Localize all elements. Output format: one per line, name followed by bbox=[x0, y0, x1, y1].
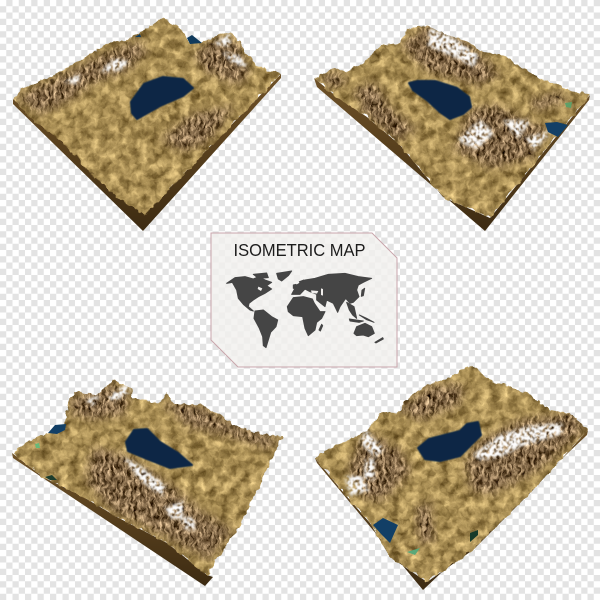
terrain surface bbox=[10, 15, 285, 220]
green field bbox=[565, 102, 572, 108]
terrain surface bbox=[310, 22, 595, 222]
small lake bbox=[48, 424, 66, 434]
lake bbox=[131, 77, 193, 119]
isometric terrain block: bottom right bbox=[312, 362, 592, 590]
soil side faces bbox=[314, 78, 590, 231]
small lake bbox=[545, 122, 568, 137]
soil side faces bbox=[315, 430, 588, 590]
center label card bbox=[211, 233, 397, 367]
soil side faces bbox=[12, 453, 213, 586]
lake bbox=[126, 429, 192, 468]
world map bbox=[227, 271, 383, 348]
dark green pond bbox=[470, 530, 478, 542]
lake bbox=[418, 422, 481, 461]
inland seas bbox=[258, 287, 323, 296]
dark green pond bbox=[45, 475, 57, 480]
soil side faces bbox=[13, 74, 281, 231]
title: ISOMETRIC MAP bbox=[234, 240, 366, 260]
isometric terrain block: top left bbox=[10, 15, 285, 231]
terrain surface bbox=[312, 362, 592, 586]
green field bbox=[407, 548, 420, 555]
isometric terrain block: bottom left bbox=[8, 376, 286, 586]
small lake bbox=[373, 518, 398, 543]
snow caps bbox=[428, 28, 552, 150]
green field bbox=[35, 443, 40, 448]
isometric terrain block: top right bbox=[310, 22, 595, 231]
card panel bbox=[211, 233, 397, 367]
snow caps bbox=[86, 383, 195, 530]
lake bbox=[409, 81, 471, 119]
snow caps bbox=[345, 423, 562, 496]
snow caps bbox=[64, 33, 248, 84]
terrain surface bbox=[8, 376, 286, 580]
small lakes bbox=[135, 34, 202, 44]
